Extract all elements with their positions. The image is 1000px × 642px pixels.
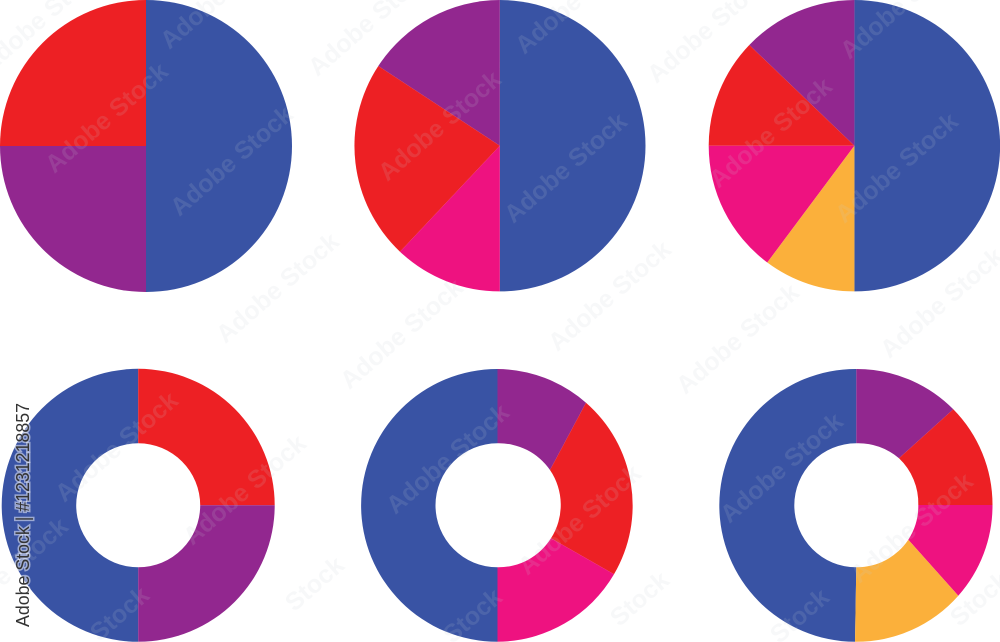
stock watermarks: Adobe Stock bbox=[513, 459, 647, 581]
stock watermarks: Adobe Stock bbox=[40, 57, 174, 179]
stock watermarks: Adobe Stock bbox=[381, 398, 515, 520]
stock watermarks: Adobe Stock bbox=[499, 107, 633, 229]
stock watermarks: Adobe Stock bbox=[845, 467, 979, 589]
stock watermarks: Adobe Stock bbox=[335, 273, 469, 395]
donut chart: three slices and half bbox=[361, 369, 633, 642]
stock watermarks: Adobe Stock bbox=[715, 407, 849, 529]
stock watermarks: Adobe Stock bbox=[543, 235, 677, 357]
stock watermarks: Adobe Stock bbox=[211, 227, 345, 349]
pie chart: three slices and half bbox=[354, 0, 645, 291]
donut chart: four slices and half bbox=[719, 369, 993, 642]
stock watermarks: Adobe Stock bbox=[165, 100, 299, 222]
stock watermarks: Stock bbox=[605, 566, 675, 632]
stock watermarks: Adobe Stock bbox=[50, 386, 184, 508]
pie chart: two quarters and half bbox=[0, 0, 292, 292]
stock watermarks: Adobe Stock bbox=[373, 65, 507, 187]
stock watermarks: Adobe Stock bbox=[671, 278, 805, 400]
pie chart: four slices and half bbox=[709, 0, 1000, 291]
stock id label: Adobe Stock | #1231218857 bbox=[13, 403, 33, 627]
donut chart: two quarters and half bbox=[2, 369, 275, 642]
stock watermarks: Adobe Stock bbox=[704, 72, 838, 194]
stock watermarks: Adobe Stock bbox=[830, 107, 964, 229]
stock watermarks: Adobe Stock bbox=[178, 429, 312, 551]
stock watermarks: Stock bbox=[280, 551, 350, 617]
